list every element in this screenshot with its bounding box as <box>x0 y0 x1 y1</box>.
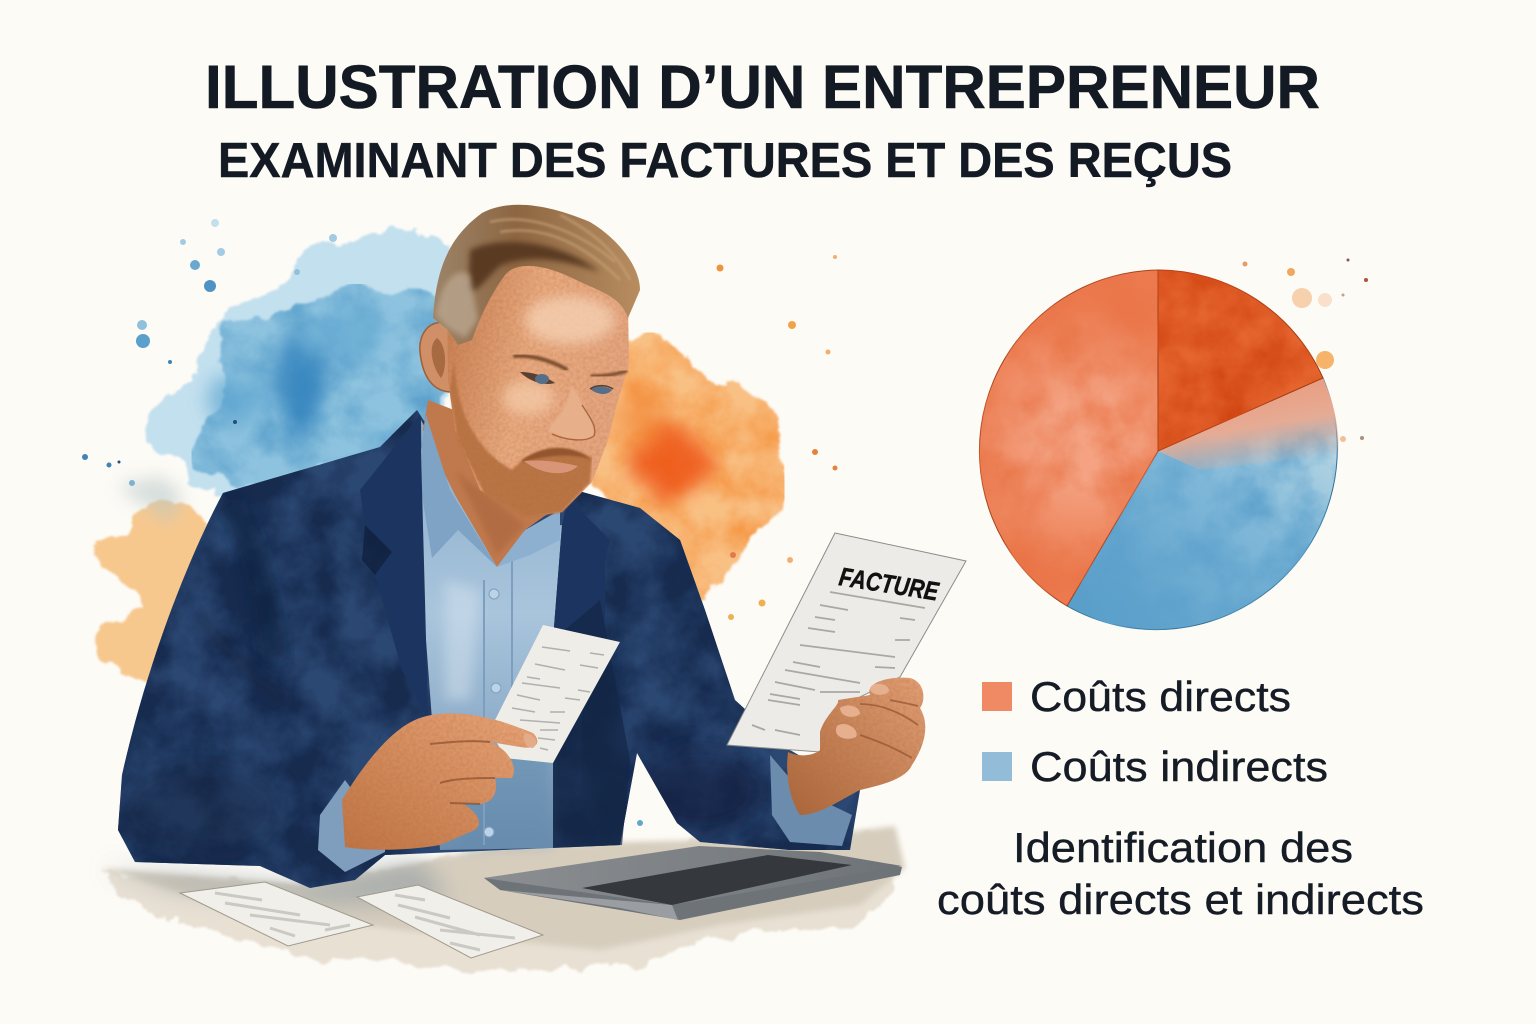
shirt cuffs <box>318 755 852 872</box>
beard <box>450 360 592 518</box>
left hand <box>342 713 537 850</box>
collar <box>418 415 560 567</box>
receipt on table 1 <box>180 882 373 946</box>
shirt <box>421 420 562 850</box>
watercolor splash: orange right <box>590 255 838 620</box>
watercolor splash: blue <box>82 219 643 826</box>
mouth <box>524 460 578 473</box>
right hand <box>787 678 925 815</box>
neck <box>423 400 560 567</box>
legend: Coûts indirects <box>1030 743 1328 790</box>
invoice label: FACTURE <box>837 561 941 607</box>
keyboard <box>582 855 852 905</box>
legend: Coûts directs <box>1030 673 1291 720</box>
laptop <box>484 846 902 920</box>
slice: direct top <box>1158 270 1323 451</box>
title: ILLUSTRATION D’UN ENTREPRENEUR <box>205 53 1320 121</box>
jacket folds <box>120 500 760 855</box>
nose <box>548 385 594 440</box>
legend <box>982 673 1328 790</box>
brows and eyes <box>515 356 626 394</box>
slice: indirect <box>1067 378 1337 630</box>
caption: coûts directs et indirects <box>937 876 1424 923</box>
entrepreneur <box>118 205 860 888</box>
shirt placket and buttons <box>484 560 512 845</box>
invoice <box>727 533 966 752</box>
head <box>420 205 640 518</box>
title <box>205 53 1320 188</box>
table <box>100 826 905 972</box>
pie splatter <box>1242 258 1368 442</box>
face <box>447 262 629 517</box>
hair <box>433 205 640 345</box>
caption <box>937 824 1424 923</box>
jacket <box>118 410 860 888</box>
lapels <box>360 415 630 848</box>
watercolor splash: orange left <box>97 477 210 685</box>
ear <box>420 322 452 392</box>
receipt on table 2 <box>357 885 543 958</box>
receipt in left hand <box>490 625 620 763</box>
caption: Identification des <box>1013 824 1353 871</box>
slice: direct left <box>979 270 1158 606</box>
pie chart <box>979 258 1368 630</box>
title: EXAMINANT DES FACTURES ET DES REÇUS <box>218 134 1232 188</box>
